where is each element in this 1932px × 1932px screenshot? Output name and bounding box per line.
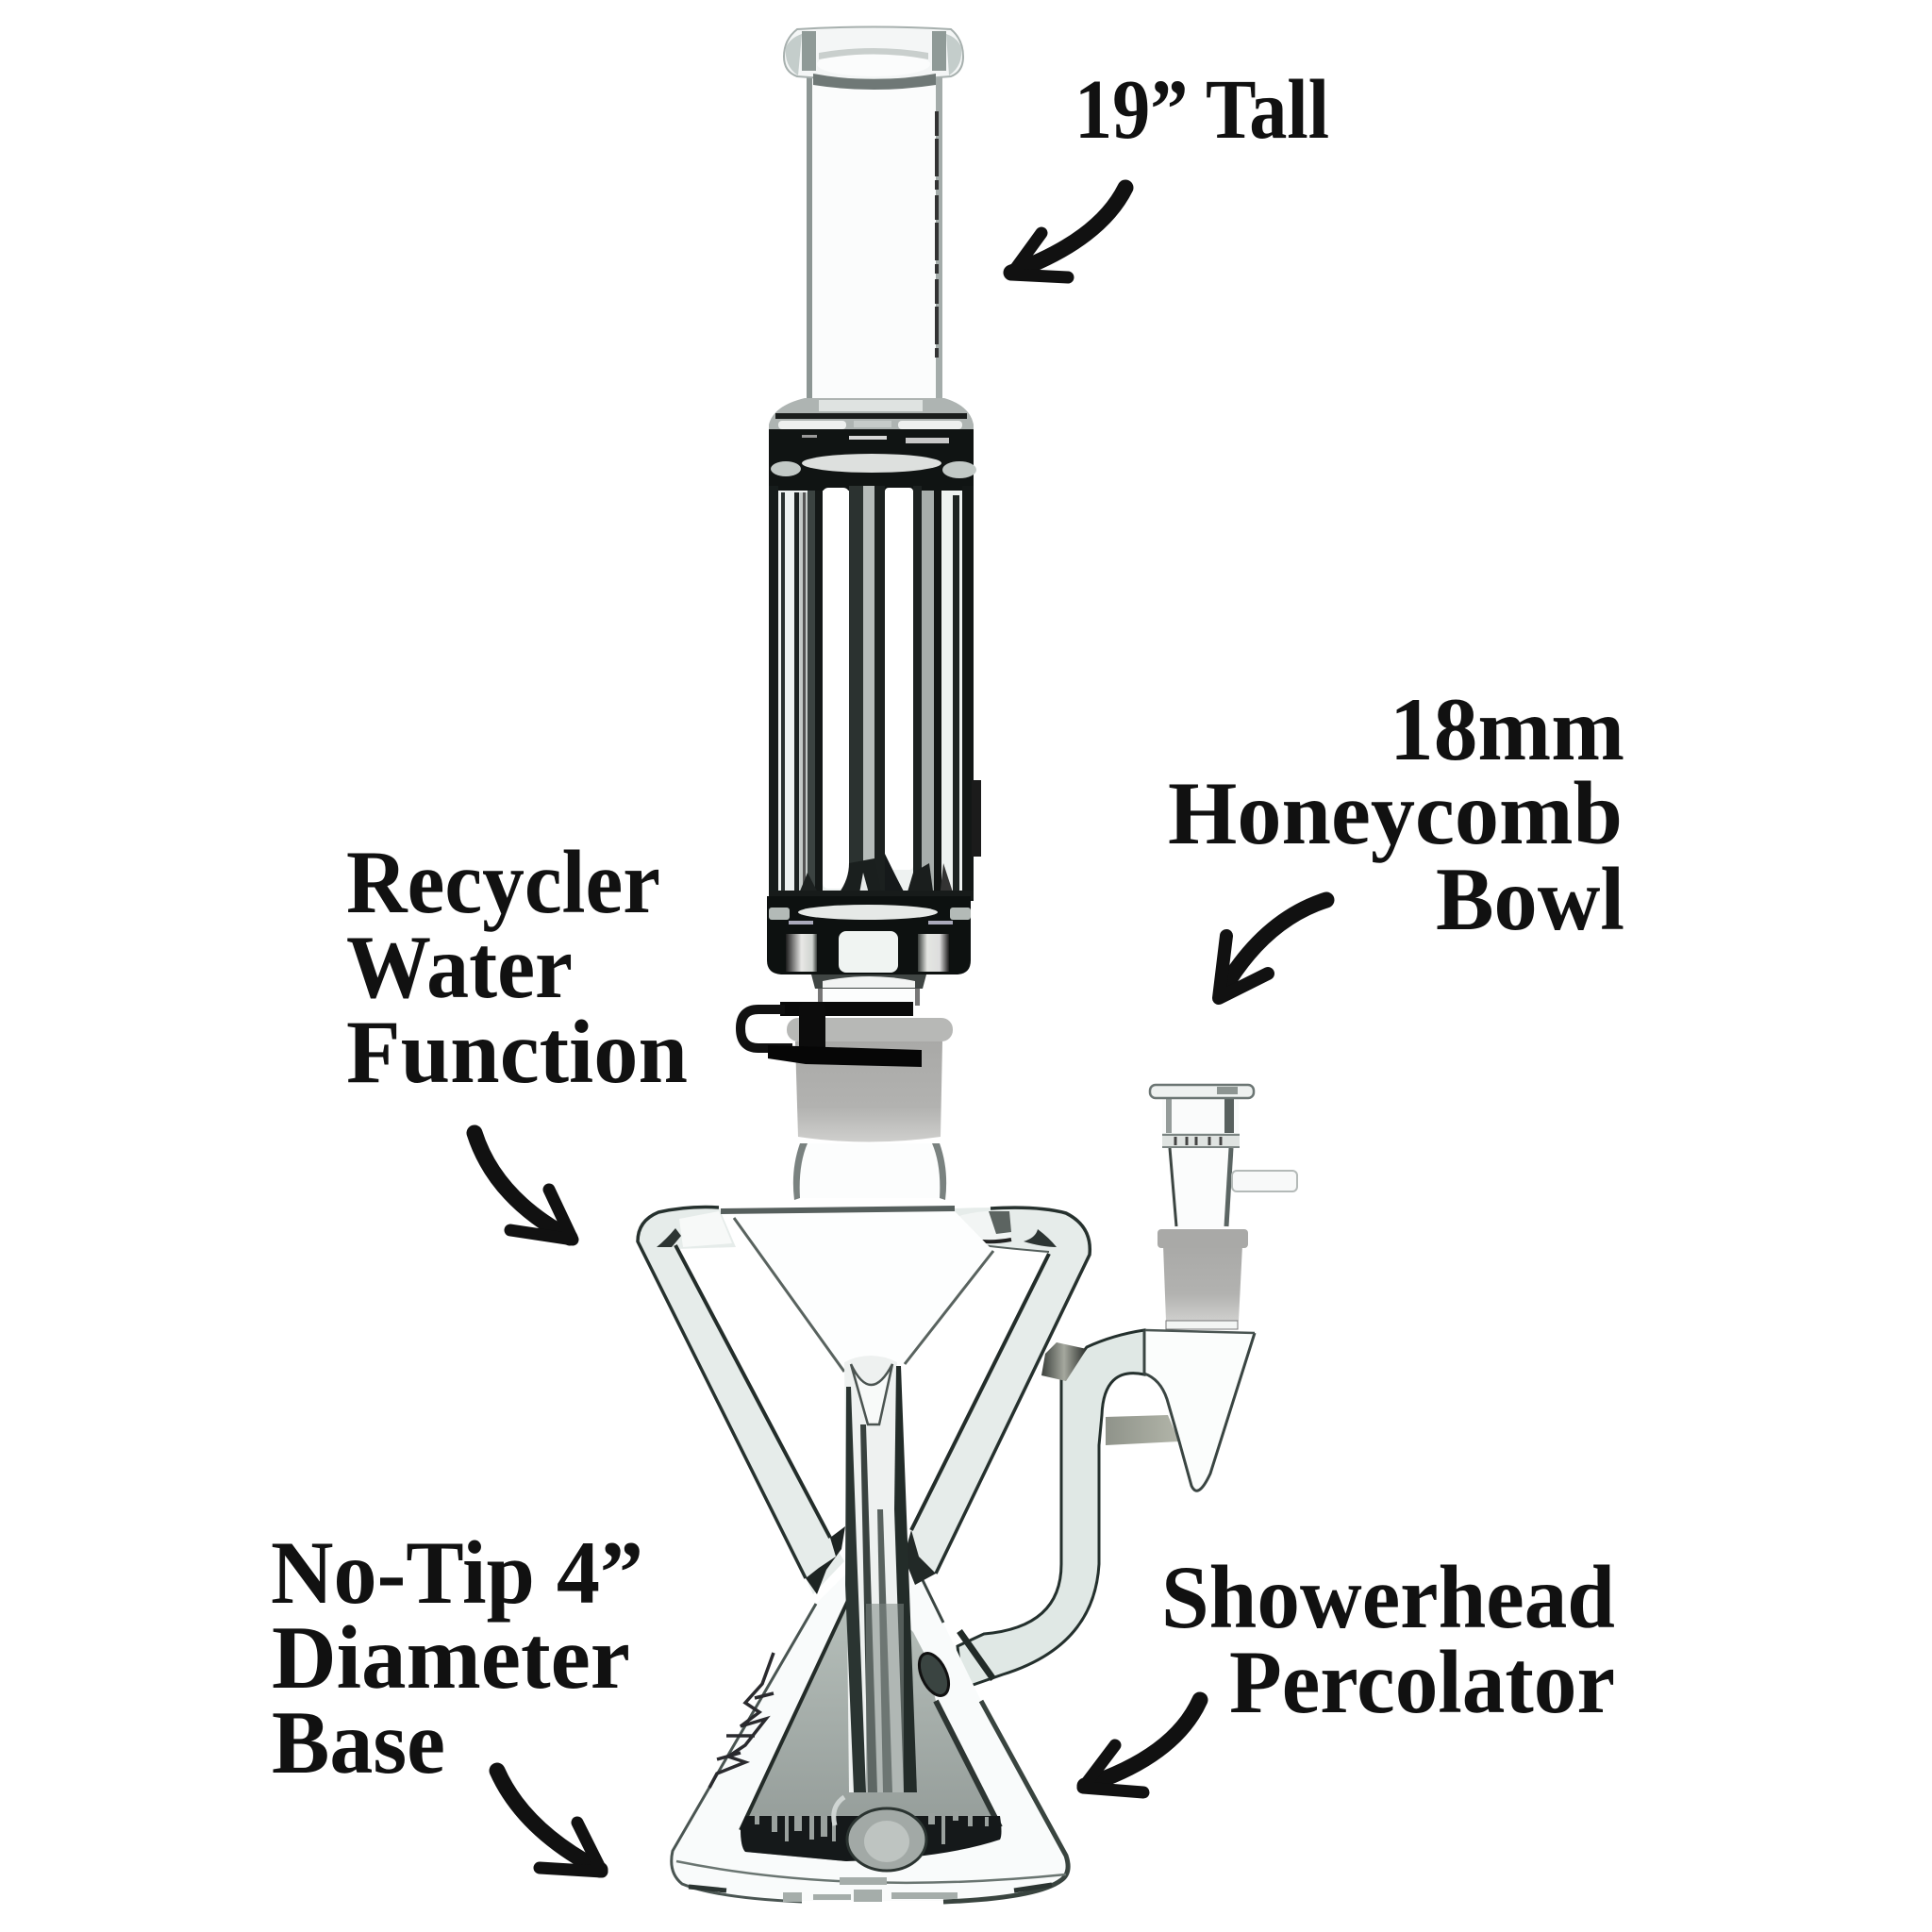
label: 18mm honeycomb bowl [1168, 679, 1624, 949]
base cone [672, 1566, 1068, 1902]
showerhead slits [741, 1816, 1002, 1861]
chamber foot with windows [767, 896, 971, 974]
keck clip [741, 1002, 922, 1067]
label: no-tip base: No-Tip 4” [271, 1523, 643, 1623]
percolator ball [834, 1797, 926, 1871]
base bottom markings [783, 1877, 958, 1902]
side tube [958, 1330, 1179, 1689]
label: showerhead percolator [1161, 1547, 1615, 1732]
chamber collar [769, 398, 974, 436]
label: 18mm honeycomb bowl: Honeycomb [1168, 763, 1623, 863]
smoky bridge [1106, 1415, 1179, 1445]
arrow: to base [497, 1771, 602, 1872]
etched logo [709, 1653, 774, 1788]
arrow: to neck [1011, 188, 1125, 277]
label: recycler water function: Water [346, 917, 573, 1017]
glass neck above frame [793, 1143, 946, 1200]
bowl joint [1158, 1229, 1248, 1329]
base floor [676, 1861, 1066, 1883]
bowl cup [1162, 1097, 1239, 1137]
frosted joint with keck clip [741, 1002, 953, 1141]
arrow: to percolator [1083, 1700, 1200, 1792]
label: recycler water function: Function [346, 1002, 688, 1102]
joint ring [787, 1018, 953, 1041]
recycler frame arms [638, 1208, 1090, 1871]
lower joint neck [811, 974, 926, 1006]
label: no-tip base: Diameter [272, 1607, 630, 1707]
arm connector [1041, 1342, 1087, 1381]
frame bulb [951, 1211, 1011, 1241]
center downstem [844, 1356, 917, 1792]
vertical tubes [769, 486, 974, 904]
bowl lip [1150, 1085, 1254, 1098]
bowl handle [1232, 1171, 1297, 1191]
label: no-tip base [271, 1523, 643, 1792]
right arm [904, 1208, 1090, 1585]
smoky percolator cone [741, 1578, 1002, 1861]
percolator ring [913, 1649, 955, 1700]
mouthpiece and neck tube [784, 26, 963, 400]
label: recycler water function [346, 832, 688, 1102]
left arm [638, 1208, 845, 1594]
label: recycler water function: Recycler [346, 832, 660, 932]
label: 18mm honeycomb bowl: 18mm [1390, 679, 1624, 779]
label: no-tip base: Base [272, 1692, 445, 1792]
label: 19 inch tall: 19” Tall [1074, 63, 1329, 157]
arrow: to frame [475, 1133, 573, 1240]
bowl and downstem [1144, 1085, 1297, 1491]
side sticker [972, 780, 981, 857]
recycler chamber with tubes [767, 398, 981, 974]
funnel [734, 1211, 993, 1372]
dark chamber head [769, 429, 976, 495]
frosted joint [795, 1041, 942, 1141]
honeycomb disc [1162, 1133, 1240, 1148]
water pipe illustration [638, 26, 1297, 1902]
side tube junction band [959, 1631, 993, 1679]
arrow: to bowl [1219, 900, 1326, 998]
label: showerhead percolator: Percolator [1229, 1632, 1615, 1732]
label: showerhead percolator: Showerhead [1161, 1547, 1615, 1647]
label: 18mm honeycomb bowl: Bowl [1436, 849, 1624, 949]
bowl stem [1168, 1148, 1229, 1228]
bowl funnel [1144, 1330, 1255, 1491]
